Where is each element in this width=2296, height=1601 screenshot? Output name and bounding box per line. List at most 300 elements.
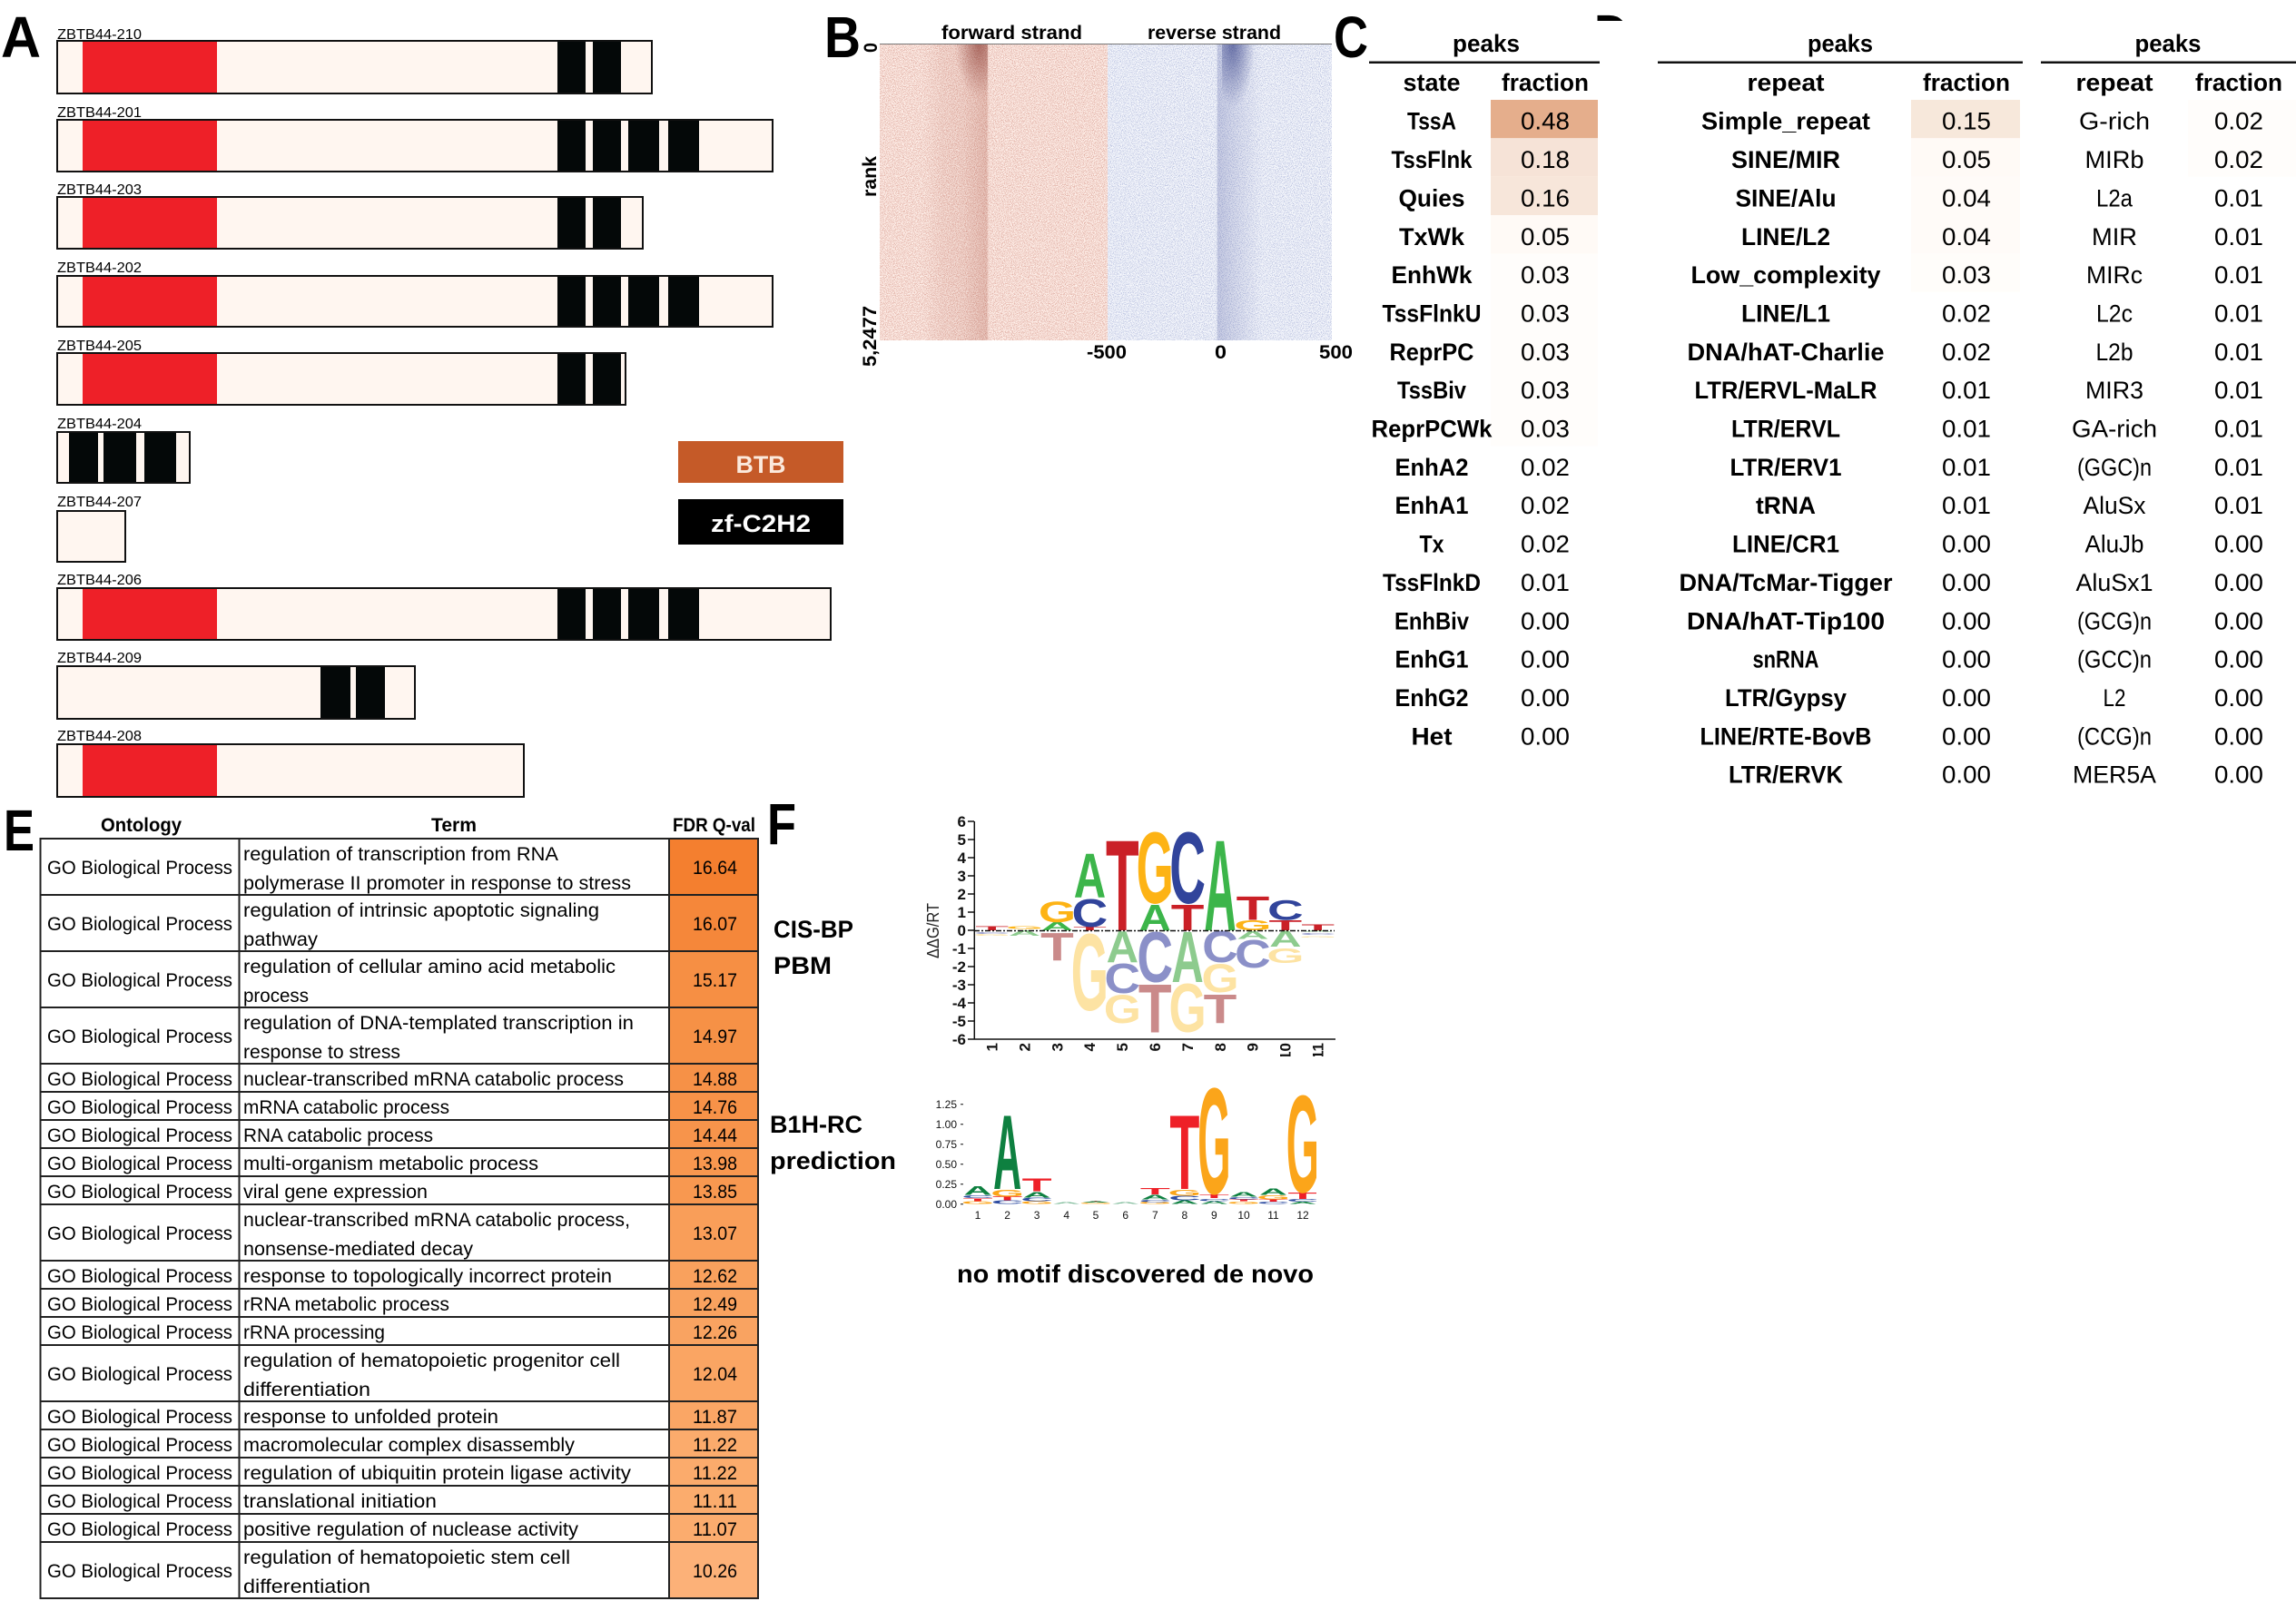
term column: translational initiation xyxy=(243,1491,437,1512)
state fractions: 0.02 xyxy=(1521,531,1570,558)
term column: regulation of transcription from RNA xyxy=(243,844,558,865)
state fractions: 0.00 xyxy=(1521,607,1570,634)
logo letters: T xyxy=(963,1197,992,1202)
column headers: fraction xyxy=(1502,69,1589,96)
subfamily names: MER5A xyxy=(2073,761,2156,789)
x axis ticks: 4 xyxy=(1063,1209,1069,1222)
ontology column: GO Biological Process xyxy=(47,1463,232,1484)
state fractions: 0.18 xyxy=(1521,146,1570,173)
subfamily names: AluSx1 xyxy=(2075,569,2153,596)
term column: regulation of hematopoietic progenitor cell xyxy=(243,1351,620,1371)
label: CIS-BP PBM xyxy=(774,916,853,979)
repeat fractions: 0.01 xyxy=(1942,377,1991,404)
subfamily fractions: 0.00 xyxy=(2214,569,2263,596)
state names: EnhG1 xyxy=(1394,646,1469,673)
CIS-BP sequence logo xyxy=(924,810,1344,1069)
lower letters (disfavoured bases): G xyxy=(973,933,1010,937)
lower letters (disfavoured bases): A xyxy=(1009,929,1040,938)
logo letters: A xyxy=(1288,1201,1317,1205)
repeat fractions: 0.02 xyxy=(1942,300,1991,327)
x axis ticks: 7 xyxy=(1179,1043,1197,1051)
FDR Q-value column: 11.22 xyxy=(693,1435,737,1456)
subfamily names: AluSx xyxy=(2083,492,2146,519)
upper letters (preferred bases): G xyxy=(1039,896,1076,928)
term column: process xyxy=(243,986,309,1007)
column headers: state xyxy=(1404,69,1460,96)
panel A: ZBTB44 isoform domain architecture xyxy=(1,5,843,797)
isoform ZBTB44-204 xyxy=(57,417,190,483)
FDR Q-value column: 12.26 xyxy=(693,1322,737,1343)
logo letters: T xyxy=(1140,1186,1170,1196)
legend: zf-C2H2 domain: zf-C2H2 xyxy=(711,510,811,537)
y axis: -4 xyxy=(952,995,967,1012)
isoform ZBTB44-204: ZBTB44-204 xyxy=(57,417,142,432)
FDR Q-value column: 13.07 xyxy=(693,1223,737,1244)
lower letters (disfavoured bases): A xyxy=(1269,927,1301,952)
x tick -500: -500 xyxy=(1087,342,1127,363)
table: repeat classes xyxy=(1658,30,2023,789)
ontology column: GO Biological Process xyxy=(47,1026,232,1047)
logo letters: G xyxy=(1256,1195,1290,1201)
logo letters: T xyxy=(1022,1175,1052,1195)
x axis ticks xyxy=(975,1209,1309,1222)
lower letters (disfavoured bases): G xyxy=(1071,911,1109,1034)
column headers: repeat xyxy=(1747,69,1825,96)
term column: mRNA catabolic process xyxy=(243,1097,449,1118)
lower letters (disfavoured bases): C xyxy=(1104,955,1140,1002)
column headers: Ontology xyxy=(101,815,182,836)
subfamily fractions: 0.01 xyxy=(2214,261,2263,289)
subfamily names: MIR xyxy=(2092,223,2137,250)
state fractions: 0.48 xyxy=(1521,108,1570,135)
isoform ZBTB44-206: ZBTB44-206 xyxy=(57,573,142,588)
term column: polymerase II promoter in response to stress xyxy=(243,873,631,894)
state names: TssA xyxy=(1407,108,1456,135)
y axis: 4 xyxy=(958,850,967,867)
zero line xyxy=(974,929,1335,931)
repeat names: LINE/RTE-BovB xyxy=(1700,722,1872,750)
ontology column: GO Biological Process xyxy=(47,1154,232,1174)
logo letters: A xyxy=(1081,1201,1110,1203)
isoform ZBTB44-210 xyxy=(57,27,652,93)
logo letters: A xyxy=(1229,1191,1258,1198)
subfamily names: (GGC)n xyxy=(2077,454,2152,481)
state fractions: 0.00 xyxy=(1521,646,1570,673)
y axis: 3 xyxy=(958,868,966,885)
isoform ZBTB44-209 xyxy=(57,651,415,719)
x axis ticks: 1 xyxy=(984,1043,1000,1051)
state names: Tx xyxy=(1420,531,1444,558)
state fractions: 0.03 xyxy=(1521,416,1570,443)
x axis ticks: 7 xyxy=(1152,1209,1158,1222)
note: no motif discovered de novo: no motif discovered de novo xyxy=(957,1260,1314,1288)
upper letters (preferred bases): C xyxy=(1072,891,1108,936)
repeat names: DNA/TcMar-Tigger xyxy=(1680,569,1893,596)
logo letters: G xyxy=(961,1201,994,1205)
column headers: fraction xyxy=(1923,69,2010,96)
FDR Q-value column: 14.44 xyxy=(693,1125,737,1146)
logo letters: C xyxy=(961,1194,994,1199)
ontology column: GO Biological Process xyxy=(47,1223,232,1244)
y axis: -5 xyxy=(952,1013,966,1030)
logo letters: A xyxy=(1023,1191,1051,1199)
term column: response to unfolded protein xyxy=(243,1407,498,1428)
upper letters (preferred bases): G xyxy=(1006,926,1043,929)
y axis: 0 xyxy=(958,922,966,939)
legend: BTB domain: BTB xyxy=(735,451,786,478)
state fractions: 0.02 xyxy=(1521,454,1570,481)
FDR Q-value column: 14.76 xyxy=(693,1097,737,1118)
state names: ReprPCWk xyxy=(1371,416,1493,443)
term column: rRNA processing xyxy=(243,1322,385,1343)
repeat names: Simple_repeat xyxy=(1701,108,1870,135)
lower letters (disfavoured bases): C xyxy=(1137,918,1173,997)
isoform ZBTB44-208 xyxy=(57,729,524,797)
repeat fractions: 0.04 xyxy=(1942,184,1991,211)
y axis: 0.00 xyxy=(936,1198,957,1211)
subfamily names: L2b xyxy=(2095,339,2133,366)
upper letters (preferred bases): T xyxy=(1301,923,1335,932)
panel C: chromatin state table xyxy=(1334,5,1600,750)
subfamily fractions: 0.02 xyxy=(2214,108,2263,135)
term column: viral gene expression xyxy=(243,1182,428,1203)
ontology column: GO Biological Process xyxy=(47,1407,232,1428)
legend: zf-C2H2 domain xyxy=(678,499,843,545)
column headers xyxy=(2075,69,2282,96)
subfamily names xyxy=(2072,108,2157,789)
state fractions: 0.05 xyxy=(1521,223,1570,250)
FDR Q-value column: 12.62 xyxy=(693,1266,737,1287)
x axis ticks: 1 xyxy=(975,1209,981,1222)
ontology column: GO Biological Process xyxy=(47,1435,232,1456)
ontology column: GO Biological Process xyxy=(47,1561,232,1582)
lower letters (disfavoured bases): G xyxy=(1168,970,1207,1046)
subfamily names: L2a xyxy=(2096,184,2133,211)
logo letters: G xyxy=(1286,1066,1319,1222)
upper letters (preferred bases): A xyxy=(1139,897,1171,938)
repeat fractions: 0.01 xyxy=(1942,416,1991,443)
heading: peaks: peaks xyxy=(1453,30,1520,57)
logo letters: A xyxy=(963,1184,992,1198)
ontology column: GO Biological Process xyxy=(47,970,232,991)
subfamily names: (GCC)n xyxy=(2077,646,2152,673)
state names: TssFlnkU xyxy=(1382,300,1482,327)
column headers: fraction xyxy=(2195,69,2282,96)
subfamily fractions: 0.00 xyxy=(2214,531,2263,558)
ontology column: GO Biological Process xyxy=(47,1182,232,1203)
FDR Q-value column: 10.26 xyxy=(693,1561,737,1582)
subfamily names: MIRb xyxy=(2084,146,2144,173)
FDR Q-value column: 11.87 xyxy=(693,1407,737,1428)
logo letters: G xyxy=(1168,1188,1201,1198)
y axis: 0.75 xyxy=(936,1138,957,1151)
x axis ticks: 9 xyxy=(1211,1209,1217,1222)
fraction heat cells xyxy=(1491,100,1598,446)
label: CIS-BP PBM: CIS-BP xyxy=(774,916,853,943)
term column: regulation of cellular amino acid metabolic xyxy=(243,957,616,977)
repeat fractions: 0.03 xyxy=(1942,261,1991,289)
upper letters (preferred bases): C xyxy=(1267,894,1304,926)
state names: Quies xyxy=(1398,184,1465,211)
repeat names: SINE/Alu xyxy=(1736,184,1836,211)
upper letters (preferred bases): C xyxy=(1169,810,1206,925)
lower letters (disfavoured bases): T xyxy=(1040,926,1074,969)
upper letters (preferred bases): T xyxy=(975,926,1009,931)
repeat fractions: 0.00 xyxy=(1942,722,1991,750)
logo letters: T xyxy=(1229,1199,1258,1202)
y axis: -1 xyxy=(952,940,966,958)
upper letters (preferred bases): A xyxy=(1041,920,1073,933)
state fractions: 0.00 xyxy=(1521,722,1570,750)
subfamily names: G-rich xyxy=(2079,108,2150,135)
upper letters (preferred bases): G xyxy=(1137,811,1174,925)
isoform ZBTB44-210: ZBTB44-210 xyxy=(57,27,142,43)
lower letters (disfavoured bases): A xyxy=(1237,928,1269,941)
isoform ZBTB44-208: ZBTB44-208 xyxy=(57,729,142,744)
state fractions: 0.03 xyxy=(1521,300,1570,327)
lower letters (disfavoured bases): A xyxy=(1107,923,1138,972)
subfamily names: MIRc xyxy=(2086,261,2143,289)
ontology column: GO Biological Process xyxy=(47,1364,232,1385)
ontology column: GO Biological Process xyxy=(47,1294,232,1315)
ontology column: GO Biological Process xyxy=(47,1266,232,1287)
legend: BTB domain xyxy=(678,441,843,483)
y axis: 6 xyxy=(958,813,966,830)
heatmap: forward and reverse strand signal xyxy=(880,44,1332,340)
term column: multi-organism metabolic process xyxy=(243,1154,538,1174)
subfamily names: AluJb xyxy=(2084,531,2144,558)
repeat names: LTR/ERVK xyxy=(1729,761,1843,789)
table grid xyxy=(40,838,758,1599)
logo letters: G xyxy=(1227,1201,1260,1205)
y axis: 2 xyxy=(958,886,966,903)
logo letters: C xyxy=(1168,1194,1201,1202)
term column: pathway xyxy=(243,929,319,950)
x axis ticks: 8 xyxy=(1182,1209,1188,1222)
x axis ticks: 3 xyxy=(1034,1209,1040,1222)
logo letters: G xyxy=(1138,1202,1172,1204)
repeat names: DNA/hAT-Charlie xyxy=(1687,339,1885,366)
upper letters (preferred bases) xyxy=(975,810,1335,958)
subfamily fractions: 0.00 xyxy=(2214,722,2263,750)
panel D: repeat family tables xyxy=(1594,3,2296,789)
isoform ZBTB44-201: ZBTB44-201 xyxy=(57,105,142,121)
x axis ticks: 10 xyxy=(1277,1043,1295,1060)
repeat fractions: 0.01 xyxy=(1942,492,1991,519)
ontology column: GO Biological Process xyxy=(47,858,232,879)
state fractions: 0.02 xyxy=(1521,492,1570,519)
y axis label: 0: 0 xyxy=(861,43,882,53)
state fractions xyxy=(1521,108,1570,750)
x axis ticks: 10 xyxy=(1237,1209,1250,1222)
table: repeat subfamilies xyxy=(2041,30,2296,789)
x axis ticks: 4 xyxy=(1081,1042,1099,1051)
heading: peaks: peaks xyxy=(2135,30,2201,57)
logo letters: A xyxy=(1141,1193,1169,1201)
term column: response to topologically incorrect protein xyxy=(243,1266,612,1287)
column headers: Term xyxy=(431,815,477,836)
FDR Q-value column: 16.64 xyxy=(693,858,737,879)
x axis ticks: 2 xyxy=(1004,1209,1010,1222)
logo letters: A xyxy=(993,1093,1021,1212)
isoform ZBTB44-209: ZBTB44-209 xyxy=(57,651,142,666)
state names: TxWk xyxy=(1399,223,1465,250)
state names: TssFlnkD xyxy=(1383,569,1481,596)
subfamily fractions: 0.00 xyxy=(2214,761,2263,789)
FDR Q-value column: 13.85 xyxy=(693,1182,737,1203)
ontology column xyxy=(47,858,232,1582)
lower letters (disfavoured bases): G xyxy=(1104,987,1141,1032)
subfamily names: MIR3 xyxy=(2085,377,2143,404)
repeat fractions: 0.15 xyxy=(1942,108,1991,135)
label: B1H-RC prediction xyxy=(770,1111,896,1174)
label: B1H-RC prediction: B1H-RC xyxy=(770,1111,862,1138)
logo letters: G xyxy=(1020,1201,1053,1205)
state fractions: 0.16 xyxy=(1521,184,1570,211)
y axis: 0.50 xyxy=(936,1158,957,1171)
repeat fractions: 0.00 xyxy=(1942,569,1991,596)
isoform ZBTB44-203: ZBTB44-203 xyxy=(57,182,142,198)
subfamily fractions: 0.01 xyxy=(2214,300,2263,327)
FDR Q-value column: 12.04 xyxy=(693,1364,737,1385)
FDR Q-value column xyxy=(693,858,737,1582)
logo letters: A xyxy=(1200,1201,1228,1205)
isoform ZBTB44-202 xyxy=(57,260,773,327)
isoform ZBTB44-206 xyxy=(57,573,831,640)
panel F: motif logos xyxy=(767,791,1344,1288)
panel letter B: B xyxy=(824,5,861,70)
repeat names: tRNA xyxy=(1756,492,1816,519)
repeat fractions: 0.00 xyxy=(1942,531,1991,558)
FDR Q-value column: 14.97 xyxy=(693,1026,737,1047)
y axis label: rank: rank xyxy=(860,156,881,197)
state names: EnhBiv xyxy=(1394,607,1469,634)
isoform ZBTB44-207 xyxy=(57,495,142,562)
x axis ticks: 11 xyxy=(1309,1043,1327,1059)
lower letters (disfavoured bases): G xyxy=(1201,957,1239,1001)
state fractions: 0.03 xyxy=(1521,261,1570,289)
logo letters: T xyxy=(1288,1191,1318,1201)
y axis label: 5,2477: 5,2477 xyxy=(860,306,881,367)
FDR Q-value column: 12.49 xyxy=(693,1294,737,1315)
lower letters (disfavoured bases): C xyxy=(1300,933,1336,936)
term column: regulation of ubiquitin protein ligase activity xyxy=(243,1463,632,1484)
repeat fractions: 0.00 xyxy=(1942,684,1991,712)
heading: forward strand: forward strand xyxy=(941,23,1082,44)
subfamily fractions: 0.01 xyxy=(2214,339,2263,366)
term column: positive regulation of nuclease activity xyxy=(243,1519,579,1540)
repeat names: DNA/hAT-Tip100 xyxy=(1687,607,1885,634)
x axis ticks xyxy=(984,1042,1344,1069)
y axis title: ΔΔG/RT xyxy=(924,903,942,958)
panel letter E: E xyxy=(4,798,34,863)
term column: regulation of hematopoietic stem cell xyxy=(243,1547,570,1568)
state fractions: 0.03 xyxy=(1521,339,1570,366)
repeat fractions: 0.05 xyxy=(1942,146,1991,173)
repeat fractions: 0.00 xyxy=(1942,646,1991,673)
x axis ticks: 6 xyxy=(1147,1043,1164,1051)
x axis ticks: 12 xyxy=(1296,1209,1309,1222)
x tick 500: 500 xyxy=(1319,342,1353,363)
ontology column: GO Biological Process xyxy=(47,1491,232,1512)
upper letters (preferred bases): T xyxy=(1171,898,1204,938)
column headers xyxy=(1404,69,1589,96)
x axis ticks: 2 xyxy=(1016,1043,1033,1051)
upper letters (preferred bases): A xyxy=(1204,812,1237,958)
logo letters: G xyxy=(1197,1056,1231,1225)
logo letters: C xyxy=(1139,1199,1171,1203)
y axis: 1.00 xyxy=(936,1118,957,1131)
logo letters: G xyxy=(1079,1203,1112,1204)
state fractions: 0.03 xyxy=(1521,377,1570,404)
repeat names: LINE/L2 xyxy=(1741,223,1830,250)
y axis: -2 xyxy=(952,958,966,976)
column headers: FDR Q-val xyxy=(673,815,755,836)
repeat names: LTR/Gypsy xyxy=(1725,684,1847,712)
upper letters (preferred bases): A xyxy=(1074,840,1106,911)
lower letters (disfavoured bases) xyxy=(973,911,1336,1047)
lower letters (disfavoured bases): T xyxy=(1138,970,1172,1047)
state fractions: 0.00 xyxy=(1521,684,1570,712)
term column: differentiation xyxy=(243,1576,370,1597)
logo letters: A xyxy=(1111,1202,1139,1204)
repeat fractions: 0.02 xyxy=(1942,339,1991,366)
upper letters (preferred bases): T xyxy=(1237,889,1270,928)
upper letters (preferred bases): G xyxy=(1234,918,1272,934)
fraction heat cells xyxy=(1911,100,2020,292)
term column: nuclear-transcribed mRNA catabolic process, xyxy=(243,1210,630,1231)
subfamily fractions: 0.01 xyxy=(2214,454,2263,481)
y axis: 0.25 xyxy=(936,1178,957,1191)
logo letters: C xyxy=(1020,1196,1053,1203)
lower letters (disfavoured bases): C xyxy=(1202,923,1238,972)
term column: RNA catabolic process xyxy=(243,1125,433,1146)
y axis: -3 xyxy=(952,977,966,994)
logo letters: C xyxy=(1286,1198,1319,1203)
isoform ZBTB44-201 xyxy=(57,105,773,172)
state names: TssFlnk xyxy=(1391,146,1473,173)
ontology column: GO Biological Process xyxy=(47,1322,232,1343)
upper letters (preferred bases): T xyxy=(1268,918,1302,934)
ontology column: GO Biological Process xyxy=(47,1125,232,1146)
x axis ticks: 3 xyxy=(1049,1043,1066,1051)
panel letter F: F xyxy=(767,791,796,857)
repeat names xyxy=(1680,108,1893,789)
lower letters (disfavoured bases): A xyxy=(1171,918,1204,998)
y axis xyxy=(936,1098,963,1211)
x axis ticks: 11 xyxy=(1267,1209,1279,1222)
isoform ZBTB44-202: ZBTB44-202 xyxy=(57,260,142,276)
lower letters (disfavoured bases): T xyxy=(1204,987,1237,1033)
repeat fractions: 0.04 xyxy=(1942,223,1991,250)
repeat names: snRNA xyxy=(1752,646,1819,673)
FDR Q-value column: 15.17 xyxy=(693,970,737,991)
repeat names: LTR/ERVL xyxy=(1731,416,1840,443)
subfamily fractions xyxy=(2214,108,2263,789)
logo letters: G xyxy=(990,1188,1024,1199)
term column: regulation of intrinsic apoptotic signaling xyxy=(243,900,599,921)
FDR Q-value column: 16.07 xyxy=(693,914,737,935)
FDR Q-value column: 11.22 xyxy=(693,1463,737,1484)
FDR heat cells xyxy=(669,839,758,1598)
term column: response to stress xyxy=(243,1042,400,1063)
subfamily fractions: 0.00 xyxy=(2214,607,2263,634)
panel letter A: A xyxy=(1,5,41,70)
subfamily names: L2c xyxy=(2096,300,2133,327)
heading: reverse strand: reverse strand xyxy=(1148,23,1281,44)
y axis: 5 xyxy=(958,831,966,849)
logo letters: C xyxy=(1227,1197,1260,1201)
